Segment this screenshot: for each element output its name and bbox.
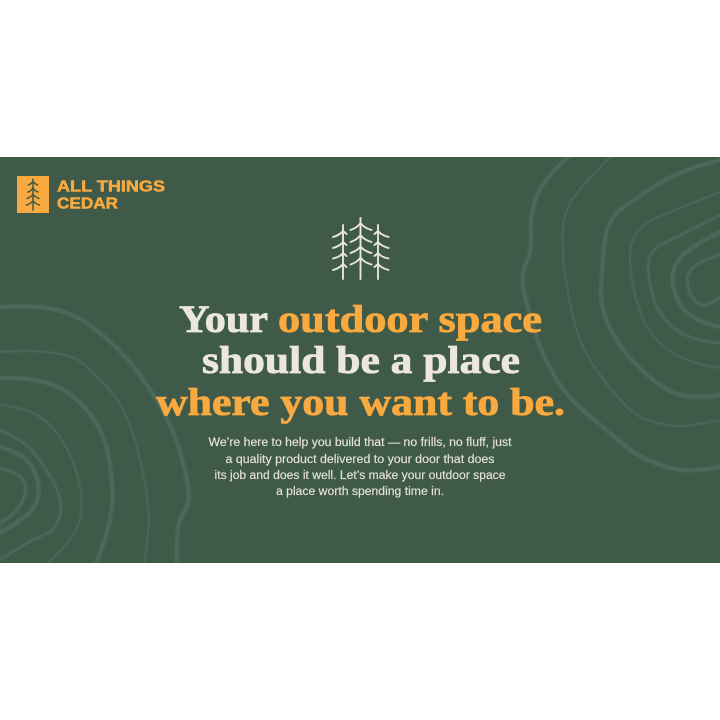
body text: a quality product delivered to your door that does xyxy=(226,454,495,466)
tree rings: top right xyxy=(523,155,720,470)
heading: should be a place xyxy=(202,339,520,382)
logo wordmark: CEDAR xyxy=(57,196,118,212)
body text: We’re here to help you build that — no frills, no fluff, just xyxy=(208,437,512,449)
tree rings: bottom left xyxy=(0,306,189,570)
body text: a place worth spending time in. xyxy=(276,486,444,498)
logo wordmark xyxy=(57,178,165,212)
icon: three pine trees xyxy=(333,218,388,279)
heading xyxy=(156,298,565,424)
panel: green banner xyxy=(0,157,720,563)
heading: where you want to be. xyxy=(156,381,565,424)
body text: its job and does it well. Let’s make your outdoor space xyxy=(214,470,506,482)
body text xyxy=(208,437,512,498)
heading: outdoor space xyxy=(278,298,542,341)
heading: Your xyxy=(179,298,268,341)
icon: logo tree badge xyxy=(17,176,49,213)
logo xyxy=(17,176,165,213)
logo wordmark: ALL THINGS xyxy=(57,178,165,196)
